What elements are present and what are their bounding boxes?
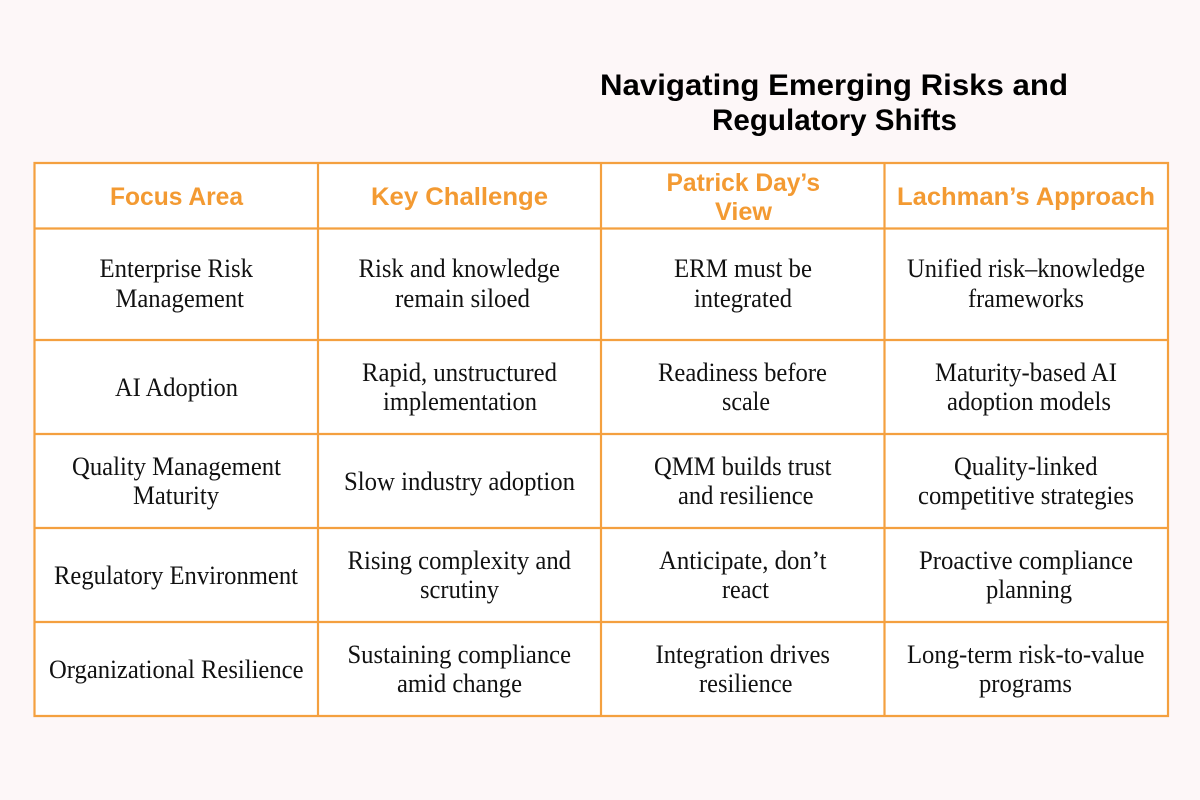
row: Regulatory Environment Lachman's approach: planning <box>986 575 1072 604</box>
row: Quality Management Maturity challenge: Slow industry adoption <box>344 467 575 496</box>
title <box>600 69 1068 137</box>
row: AI Adoption challenge: implementation <box>383 387 537 416</box>
row: Quality Management Maturity Lachman's approach <box>918 452 1134 510</box>
row: Enterprise Risk Management challenge: Risk and knowledge <box>358 254 560 283</box>
row: Regulatory Environment Patrick Day's view: Anticipate, don’t <box>659 546 827 575</box>
header: Patrick Day's View: View <box>715 198 773 226</box>
row: Regulatory Environment challenge: scrutiny <box>420 575 499 604</box>
row: Organizational Resilience challenge <box>348 640 571 698</box>
row: Regulatory Environment focus area: Regulatory Environment <box>54 561 299 590</box>
header: Focus Area: Focus Area <box>110 183 244 211</box>
row: Organizational Resilience challenge: amid change <box>397 669 522 698</box>
row: AI Adoption challenge: Rapid, unstructured <box>362 358 557 387</box>
row: AI Adoption Patrick Day's view: Readiness before <box>658 358 827 387</box>
row: Enterprise Risk Management Lachman's approach <box>907 254 1145 313</box>
row: Quality Management Maturity focus area: Quality Management <box>72 452 282 481</box>
header: Patrick Day's View: Patrick Day’s <box>666 169 820 197</box>
row: Enterprise Risk Management challenge: remain siloed <box>395 284 530 313</box>
row: Quality Management Maturity Lachman's approach: Quality-linked <box>954 452 1098 481</box>
row: Quality Management Maturity focus area <box>72 452 282 510</box>
header: Patrick Day's View <box>666 169 820 226</box>
row: Regulatory Environment Patrick Day's view <box>659 546 827 604</box>
row: Enterprise Risk Management focus area: Enterprise Risk <box>100 254 253 283</box>
row: AI Adoption Patrick Day's view: scale <box>722 387 770 416</box>
row: Quality Management Maturity Patrick Day's view <box>654 452 832 510</box>
header: Lachman's Approach: Lachman’s Approach <box>897 183 1155 211</box>
row: AI Adoption Patrick Day's view <box>658 358 827 416</box>
row: Quality Management Maturity Patrick Day's view: QMM builds trust <box>654 452 832 481</box>
row: Enterprise Risk Management Patrick Day's view: ERM must be <box>674 254 812 283</box>
row: Enterprise Risk Management Patrick Day's view <box>674 254 812 313</box>
title: Regulatory Shifts <box>712 104 957 137</box>
row: Quality Management Maturity Lachman's approach: competitive strategies <box>918 481 1134 510</box>
row: Regulatory Environment challenge: Rising complexity and <box>348 546 571 575</box>
row: Organizational Resilience challenge: Sustaining compliance <box>348 640 571 669</box>
panel: comparison table <box>34 163 1168 716</box>
table background and grid <box>34 163 1168 716</box>
row: Quality Management Maturity focus area: Maturity <box>133 481 219 510</box>
header: Key Challenge: Key Challenge <box>371 183 548 211</box>
row: Organizational Resilience Lachman's approach: Long-term risk-to-value <box>907 640 1144 669</box>
row: AI Adoption Lachman's approach <box>935 358 1117 416</box>
row: Organizational Resilience Lachman's approach <box>907 640 1144 698</box>
row: Enterprise Risk Management challenge <box>358 254 560 313</box>
row: Regulatory Environment Lachman's approach: Proactive compliance <box>919 546 1133 575</box>
row: Enterprise Risk Management focus area <box>100 254 253 313</box>
row: AI Adoption focus area: AI Adoption <box>115 373 238 402</box>
row: AI Adoption Lachman's approach: Maturity-based AI <box>935 358 1117 387</box>
row: Enterprise Risk Management Lachman's approach: frameworks <box>968 284 1084 313</box>
row: Organizational Resilience focus area: Organizational Resilience <box>49 655 304 684</box>
row: Organizational Resilience Lachman's approach: programs <box>979 669 1072 698</box>
row: AI Adoption Lachman's approach: adoption models <box>947 387 1111 416</box>
row: AI Adoption challenge <box>362 358 557 416</box>
row: Regulatory Environment Lachman's approach <box>919 546 1133 604</box>
row: Regulatory Environment Patrick Day's view: react <box>722 575 770 604</box>
row: Organizational Resilience Patrick Day's view: resilience <box>699 669 792 698</box>
row: Enterprise Risk Management Patrick Day's view: integrated <box>694 284 792 313</box>
row: Enterprise Risk Management Lachman's approach: Unified risk–knowledge <box>907 254 1145 283</box>
row: Enterprise Risk Management focus area: Management <box>116 284 245 313</box>
row: Organizational Resilience Patrick Day's view: Integration drives <box>656 640 830 669</box>
title: Navigating Emerging Risks and <box>600 69 1068 102</box>
row: Quality Management Maturity Patrick Day's view: and resilience <box>678 481 814 510</box>
row: Organizational Resilience Patrick Day's view <box>656 640 830 698</box>
row: Regulatory Environment challenge <box>348 546 571 604</box>
